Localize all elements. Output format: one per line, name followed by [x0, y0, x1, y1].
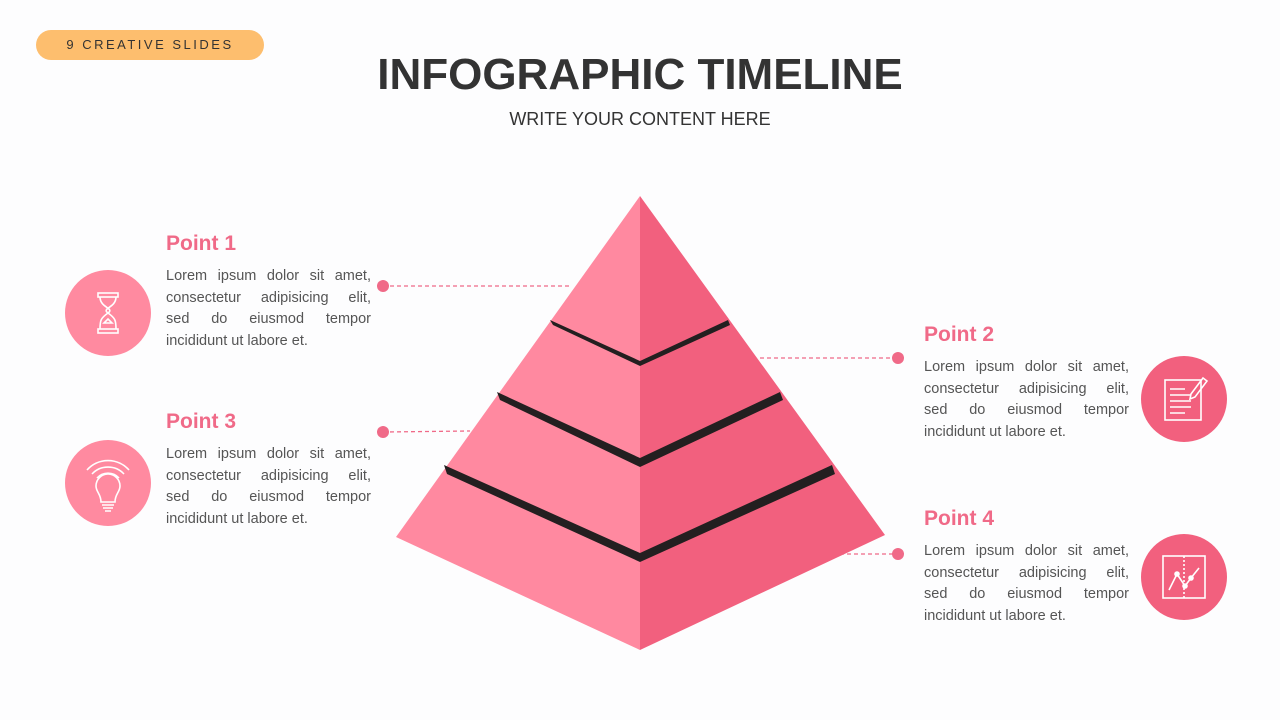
point 3: incididunt ut labore et. — [166, 510, 308, 526]
point 4: sed do eiusmod tempor — [924, 586, 1129, 602]
point 2: sed do eiusmod tempor — [924, 402, 1129, 418]
point 1: incididunt ut labore et. — [166, 332, 308, 348]
point 2: consectetur adipisicing elit, — [924, 380, 1129, 396]
point 2: Lorem ipsum dolor sit amet, — [924, 359, 1129, 375]
icon: document — [1141, 356, 1227, 442]
pyramid — [396, 196, 885, 650]
point 1: consectetur adipisicing elit, — [166, 290, 371, 306]
badge: 9 CREATIVE SLIDES — [66, 37, 234, 52]
point 4: incididunt ut labore et. — [924, 608, 1066, 624]
subtitle: WRITE YOUR CONTENT HERE — [509, 109, 771, 129]
badge — [36, 30, 264, 60]
point 4 — [924, 507, 1129, 624]
point 2 — [924, 323, 1129, 440]
icon: hourglass — [65, 270, 151, 356]
title: INFOGRAPHIC TIMELINE — [377, 50, 903, 99]
point 3: Point 3 — [166, 410, 236, 433]
point 1 — [166, 232, 371, 348]
point 2: Point 2 — [924, 323, 994, 346]
point 4: Point 4 — [924, 507, 994, 530]
point 1: sed do eiusmod tempor — [166, 311, 371, 327]
point 1: Point 1 — [166, 232, 236, 255]
point 4: consectetur adipisicing elit, — [924, 564, 1129, 580]
point 3 — [166, 410, 371, 526]
icon: light bulb — [65, 440, 151, 526]
point 3: consectetur adipisicing elit, — [166, 468, 371, 484]
point 2: incididunt ut labore et. — [924, 424, 1066, 440]
point 4: Lorem ipsum dolor sit amet, — [924, 543, 1129, 559]
point 3: sed do eiusmod tempor — [166, 489, 371, 505]
point 1: Lorem ipsum dolor sit amet, — [166, 268, 371, 284]
icon: chart — [1141, 534, 1227, 620]
point 3: Lorem ipsum dolor sit amet, — [166, 446, 371, 462]
connectors — [377, 280, 904, 560]
